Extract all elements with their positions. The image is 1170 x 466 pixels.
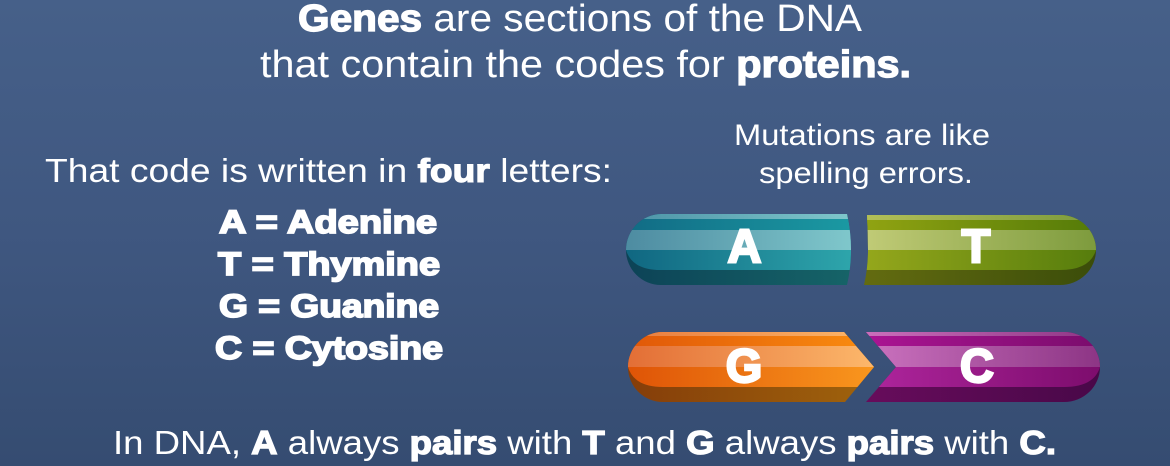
list item: adenine: A = Adenine bbox=[219, 204, 437, 240]
text: mutations note bbox=[734, 119, 990, 190]
letter A: A bbox=[728, 220, 761, 272]
text: pairing rule: In DNA, A always pairs with T and G always pairs with C. bbox=[113, 424, 1056, 461]
list item: guanine: G = Guanine bbox=[219, 288, 439, 324]
segment: C bbox=[866, 332, 1100, 402]
letter T: T bbox=[962, 220, 991, 272]
list item: thymine: T = Thymine bbox=[218, 246, 440, 282]
segment: T bbox=[864, 215, 1096, 285]
title: that contain the codes for proteins. bbox=[260, 44, 911, 86]
title bbox=[260, 0, 911, 86]
text: mutations note: spelling errors. bbox=[759, 157, 973, 190]
list item: cytosine: C = Cytosine bbox=[215, 330, 443, 366]
list: base letters bbox=[215, 204, 443, 366]
text: four letters intro: That code is written in four letters: bbox=[45, 152, 612, 189]
letter C: C bbox=[960, 339, 994, 392]
text: mutations note: Mutations are like bbox=[734, 119, 990, 152]
letter G: G bbox=[726, 339, 762, 392]
segment: G bbox=[628, 332, 874, 402]
segment: A bbox=[626, 214, 851, 285]
